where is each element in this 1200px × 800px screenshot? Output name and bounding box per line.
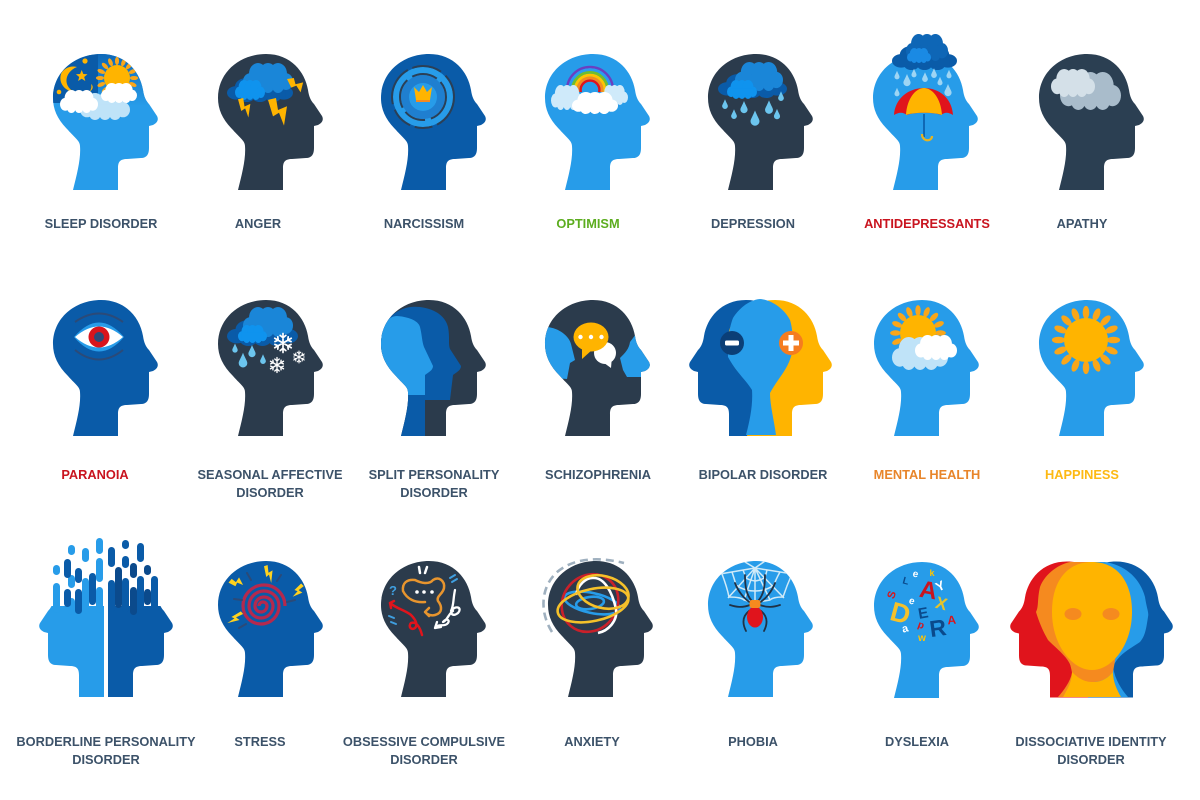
centre blue figure: [728, 299, 793, 435]
panel: dissociative identity disorder: [1010, 562, 1173, 767]
head: [548, 561, 653, 697]
label: BIPOLAR DISORDER: [699, 467, 827, 482]
panel: schizophrenia: [542, 300, 655, 482]
icon: jumbled letters: [885, 568, 957, 644]
inner faces: [542, 327, 655, 379]
icon: sun and clouds: [890, 305, 957, 370]
panel: dyslexia: [874, 562, 979, 749]
panel: happiness: [1039, 300, 1144, 482]
panel: stress: [218, 561, 323, 749]
head: [381, 300, 486, 436]
falling fragments: [53, 538, 158, 615]
panel: antidepressants: [864, 34, 990, 231]
label: APATHY: [1057, 216, 1108, 231]
right blue head: [108, 606, 173, 697]
label: DISORDER: [390, 752, 458, 767]
icon: jumbled letters: A: [917, 576, 939, 605]
panel: narcissism: [381, 54, 486, 231]
label: NARCISSISM: [384, 216, 464, 231]
icon: jumbled letters: k: [929, 568, 935, 578]
icon: jumbled letters: X: [933, 593, 950, 615]
label: OPTIMISM: [556, 216, 620, 231]
head: [1039, 300, 1144, 436]
icon: storm cloud: [227, 63, 303, 126]
label: SLEEP DISORDER: [45, 216, 157, 231]
icon: jumbled letters: L: [901, 575, 910, 588]
icon: night and day: [52, 53, 148, 120]
icon: jumbled letters: D: [887, 596, 914, 630]
panel: obsessive compulsive disorder: [343, 561, 506, 767]
head: [545, 300, 650, 436]
head: [1039, 54, 1144, 190]
head: [545, 54, 650, 190]
icon: jumbled letters: R: [928, 614, 948, 642]
panel: anxiety: [543, 559, 653, 749]
panel: bipolar disorder: [689, 299, 832, 482]
layered heads: [376, 307, 461, 436]
head: [218, 561, 323, 697]
icon: jumbled letters: e: [912, 569, 920, 581]
icon: jumbled letters: p: [916, 619, 926, 632]
label: PHOBIA: [728, 734, 778, 749]
icon: jumbled letters: w: [917, 633, 926, 644]
head: [874, 562, 979, 698]
icon: jumbled letters: e: [908, 596, 916, 608]
panel: apathy: [1039, 54, 1144, 231]
panel: phobia: [708, 559, 813, 749]
panel: mental health: [874, 300, 980, 482]
panel: anger: [218, 54, 323, 231]
icon: scribbles and dashed aura: [543, 559, 632, 643]
label: DISORDER: [236, 485, 304, 500]
icon: speech bubbles: [574, 322, 616, 368]
right yellow head: [727, 300, 832, 436]
panel: paranoia: [53, 300, 158, 482]
label: OBSESSIVE COMPULSIVE: [343, 734, 505, 749]
red head: [1010, 562, 1115, 698]
icon: plus: [779, 331, 803, 355]
icon: sun: [1052, 306, 1120, 374]
icon: maze and crown: [392, 66, 454, 128]
label: DISORDER: [1057, 752, 1125, 767]
head: [708, 54, 813, 190]
eyes: [1064, 608, 1120, 620]
label: ANGER: [235, 216, 281, 231]
left light head: [39, 606, 104, 697]
head: [218, 54, 323, 190]
label: SPLIT PERSONALITY: [369, 467, 499, 482]
icon: jumbled letters: A: [947, 613, 957, 627]
icon: jumbled letters: S: [885, 589, 899, 600]
icon: spider: [730, 575, 780, 631]
head: [381, 561, 486, 697]
icon: jumbled letters: Y: [933, 577, 947, 595]
label: ANTIDEPRESSANTS: [864, 216, 990, 231]
icon: spider web: [720, 559, 793, 601]
icon: tangled lines: [389, 567, 460, 635]
head: [873, 54, 978, 190]
label: HAPPINESS: [1045, 467, 1119, 482]
orange chin: [1068, 655, 1116, 682]
panel: seasonal affective disorder: [197, 300, 343, 500]
head: [218, 300, 323, 436]
yellow neck: [1063, 672, 1121, 697]
label: DEPRESSION: [711, 216, 795, 231]
light blue layer: [1092, 562, 1148, 697]
yellow face: [1052, 562, 1132, 670]
icon: snow cloud: [227, 307, 304, 372]
icon: jumbled letters: a: [901, 622, 911, 636]
label: SCHIZOPHRENIA: [545, 467, 651, 482]
label: ANXIETY: [564, 734, 620, 749]
label: STRESS: [234, 734, 286, 749]
label: DISORDER: [72, 752, 140, 767]
question mark: ?: [389, 583, 397, 598]
label: DYSLEXIA: [885, 734, 949, 749]
label: PARANOIA: [61, 467, 129, 482]
panel: depression: [708, 54, 813, 231]
head: [708, 561, 813, 697]
orange layer: [1036, 562, 1092, 697]
label: SEASONAL AFFECTIVE: [197, 467, 343, 482]
panel: borderline personality disorder: [16, 538, 196, 767]
left dark head: [689, 300, 794, 436]
head: [53, 54, 158, 190]
icon: grey cloud: [1051, 69, 1121, 110]
label: DISSOCIATIVE IDENTITY: [1015, 734, 1167, 749]
icon: rain cloud: [718, 62, 787, 126]
icon: spiral and bolts: [225, 565, 306, 628]
icon: jumbled letters: E: [917, 604, 930, 623]
panel: sleep disorder: [45, 53, 158, 231]
blue head: [1068, 562, 1173, 698]
icon: minus: [720, 331, 744, 355]
panel: optimism: [545, 54, 650, 231]
label: MENTAL HEALTH: [874, 467, 980, 482]
label: BORDERLINE PERSONALITY: [16, 734, 196, 749]
icon: rainbow and clouds: [551, 67, 628, 114]
head: [874, 300, 979, 436]
icon: eye: [74, 314, 124, 360]
icon: cloud and umbrella: [892, 34, 957, 140]
panel: split personality disorder: [369, 300, 500, 500]
label: DISORDER: [400, 485, 468, 500]
head: [53, 300, 158, 436]
head: [381, 54, 486, 190]
